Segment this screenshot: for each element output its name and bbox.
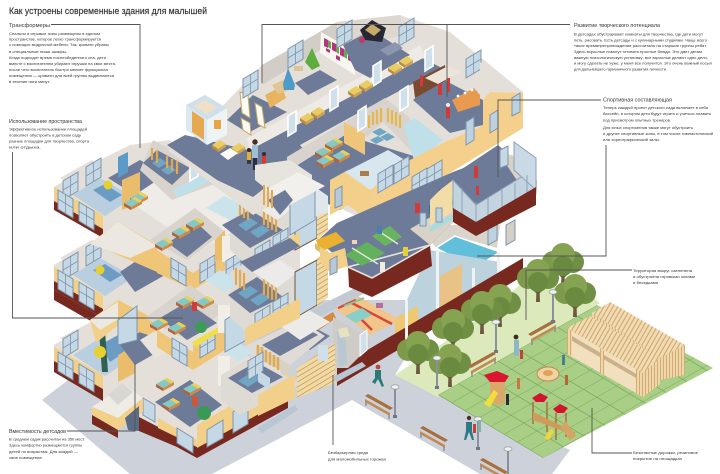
sports deck: [315, 158, 500, 297]
kitchen: [413, 46, 483, 133]
creative room: trees and bookcase: [283, 32, 358, 95]
text block: territory: [633, 269, 695, 285]
text block: safe paths: покрытие на площадках: [633, 457, 682, 461]
text block: use of space: позволяет обустроить в детском саду: [9, 134, 81, 138]
easel room: [227, 70, 294, 135]
text block: use of space: или отдыха.: [9, 146, 41, 150]
text block: sports: и другие спортивные зоны, в том числе гимнастический: [603, 132, 713, 136]
text block: use of space: [9, 119, 90, 150]
text block: sports: Теперь каждый проект детского сада включает в себя: [603, 106, 708, 110]
text block: transformers: помещения — кровати для всей группы выдвигаются: [9, 74, 114, 78]
text block: capacity: детей по возрастам. Для каждой —: [9, 450, 78, 454]
doors and sofas along corridor: [212, 56, 413, 182]
text block: creative potential: Здесь взрослые помогут готовить простые блюда. Это дает детям: [574, 50, 702, 54]
corridor wall: [247, 45, 425, 150]
text block: capacity: Здесь комфортно размещаются группы: [9, 444, 82, 448]
text block: creative potential: такое времяпрепровождение рассчитано на старшие группы ребят.: [574, 44, 707, 48]
piano room: [337, 18, 414, 78]
text block: barrier-free: для маломобильных горожан: [328, 458, 386, 462]
text block: capacity: В среднем садик рассчитан на 350 мест.: [9, 438, 85, 442]
middle floor wing: [54, 172, 300, 370]
glass balcony deck: [453, 142, 537, 236]
text block: territory: и беседками: [633, 281, 658, 285]
title: Как устроены современные здания для малышей: [9, 6, 207, 17]
upper level: back floor: [167, 15, 523, 222]
text block: creative potential: [574, 23, 712, 72]
yellow facade with windows: [370, 62, 523, 222]
ground: pavement: [42, 300, 570, 474]
text block: creative potential: Развитие творческого потенциала: [574, 23, 660, 29]
text block: transformers: Трансформеры: [9, 23, 50, 29]
street lamps: [391, 290, 557, 474]
lowest floor wing (left): [54, 300, 288, 458]
bedroom unit, middle floor: [145, 285, 250, 370]
text block: creative potential: петь, рисовать. Есть детсады и с кулинарными студиями. Чаще всего: [574, 38, 707, 42]
upper floor wing: [54, 140, 300, 290]
playground: play set one: [484, 371, 509, 407]
text block: transformers: в специальные ниши шкафы.: [9, 50, 67, 54]
text block: capacity: Вместимость детсадов: [9, 429, 66, 435]
lowest floor: blue-mat rooms: [221, 305, 330, 416]
elevator box: [186, 95, 227, 145]
text block: sports: Для юных спортсменов также могут обустроить: [603, 126, 693, 130]
pavilion: wooden pergola: [567, 302, 685, 397]
text block: sports: под присмотром опытных тренеров.: [603, 118, 671, 122]
back bedroom with blue mats and glass room: [140, 140, 219, 200]
trees: [397, 243, 596, 387]
text block: transformers: с помощью модульной мебели. Так, кровати убраны: [9, 43, 109, 47]
text block: creative potential: для дальнейшего гармоничного развития личности.: [574, 68, 667, 72]
text block: transformers: в течение пяти минут.: [9, 80, 50, 84]
text block: use of space: Эффективное использование площадей: [9, 128, 87, 132]
blue-mat room module, upper: [206, 183, 328, 275]
main corridor: [167, 57, 442, 197]
text block: capacity: свое помещение.: [9, 456, 43, 460]
text block: transformers: пространстве, которое легко трансформируется: [9, 38, 101, 42]
text block: transformers: после чего воспитатель быстро меняет функционал: [9, 68, 108, 72]
text block: transformers: Когда подходит время послеобеденного сна, дети: [9, 56, 106, 60]
text block: barrier-free: [328, 451, 386, 462]
text block: safe paths: [633, 451, 698, 461]
lawn: playground rubber tiles: [438, 305, 713, 458]
small yellow tower with window: [330, 150, 409, 222]
rainbow room: [316, 296, 400, 368]
left wing unit, lower: [54, 300, 180, 401]
text block: use of space: Использование пространства: [9, 119, 83, 125]
left wing unit, middle: [54, 222, 165, 318]
benches: [365, 320, 556, 474]
teacher and children: [247, 139, 266, 170]
text block: sports: Спортивная составляющая: [603, 98, 672, 104]
text block: use of space: разные площадки для творчества, спорта: [9, 140, 90, 144]
bedroom unit, upper floor: [150, 208, 241, 290]
ground level: pool and glass wall: [337, 218, 523, 386]
text block: creative potential: и могу сделать не хуже, у меня все получится. Это очень важный посыл: [574, 62, 712, 66]
text block: creative potential: В детсадах обустраивают комнаты для творчества, где дети могут: [574, 32, 703, 36]
lower room under courtyard: [255, 160, 328, 235]
text block: transformers: [9, 23, 116, 84]
second row room: beds and mats: [286, 86, 443, 210]
blue-mat room module, middle: [205, 238, 328, 345]
text block: sports: или хореографический залы.: [603, 138, 660, 142]
lower entrance: shingled wall: [243, 287, 366, 433]
text block: territory: и обустроена игровыми зонами: [633, 275, 695, 279]
text block: transformers: вместе с воспитателем убирают игрушки на свои места,: [9, 62, 116, 66]
lawn: light green area: [395, 285, 600, 397]
people in the yard: [372, 335, 568, 440]
text block: barrier-free: Безбарьерная среда: [328, 451, 369, 455]
text block: sports: [603, 98, 713, 142]
text block: safe paths: Безопасные дорожки, резиновое: [633, 451, 698, 455]
playground: play set two: [532, 393, 576, 440]
left wing unit, upper: [54, 152, 165, 238]
text block: sports: бассейн, в котором дети будут играть и учиться плавать: [603, 112, 711, 116]
playground: carousel: [537, 367, 559, 381]
leader lines: [12, 24, 632, 453]
text block: capacity: [9, 429, 85, 460]
text block: territory: Территория вокруг озеленена: [633, 269, 693, 273]
text block: creative potential: важную психологическую установку: все взрослые делают одно дело,: [574, 56, 708, 60]
text block: transformers: Спальни и игровые зоны размещены в едином: [9, 32, 100, 36]
